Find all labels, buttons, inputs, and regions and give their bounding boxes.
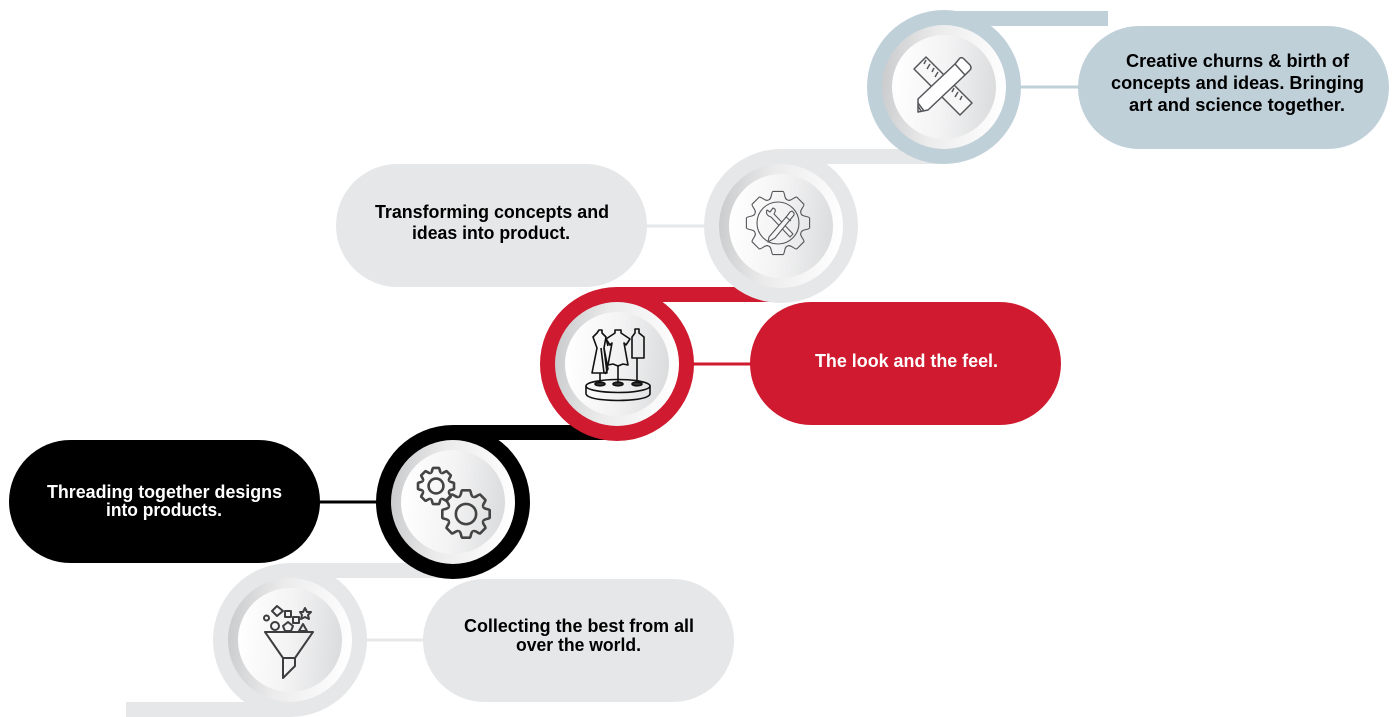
icon: two gears — [418, 468, 490, 538]
icon: funnel with shapes — [264, 606, 313, 678]
pill: the look and the feel — [750, 302, 1061, 425]
ring: look and feel — [540, 287, 694, 441]
step 2: transforming — [336, 149, 858, 303]
pill: creative churns: art and science together. — [1129, 95, 1345, 115]
pill: collecting the best — [423, 579, 734, 702]
step 1: ideation — [867, 10, 1389, 164]
pill: threading together — [9, 440, 320, 563]
icon: ruler and pencil — [914, 57, 972, 115]
pill: transforming concepts: ideas into product. — [412, 223, 570, 243]
pill: threading together: Threading together designs — [47, 482, 282, 502]
pill: creative churns: concepts and ideas. Bringing — [1111, 73, 1364, 93]
ring: ideation — [867, 10, 1021, 164]
ring: threading — [376, 425, 530, 579]
pill: creative churns: Creative churns & birth of — [1126, 51, 1350, 71]
icon: dress mannequins on a platform — [586, 329, 650, 400]
pill: the look and the feel: The look and the feel. — [815, 351, 998, 371]
tail bars connecting the steps — [126, 11, 1108, 717]
pill: threading together: into products. — [106, 500, 222, 520]
pill: creative churns — [1078, 26, 1389, 149]
ring: transforming — [704, 149, 858, 303]
connector lines between rings and pills — [318, 86, 1080, 642]
pill: transforming concepts: Transforming concepts and — [375, 202, 609, 222]
pill: collecting the best: Collecting the best from all — [464, 616, 694, 636]
pill: transforming concepts — [336, 164, 647, 287]
icon: gear with wrench and pencil — [746, 191, 810, 255]
step 3: look and feel — [540, 287, 1061, 441]
ring: collecting — [213, 563, 367, 717]
step 5: collecting — [213, 563, 734, 717]
step 4: threading — [9, 425, 530, 579]
pill: collecting the best: over the world. — [516, 635, 641, 655]
